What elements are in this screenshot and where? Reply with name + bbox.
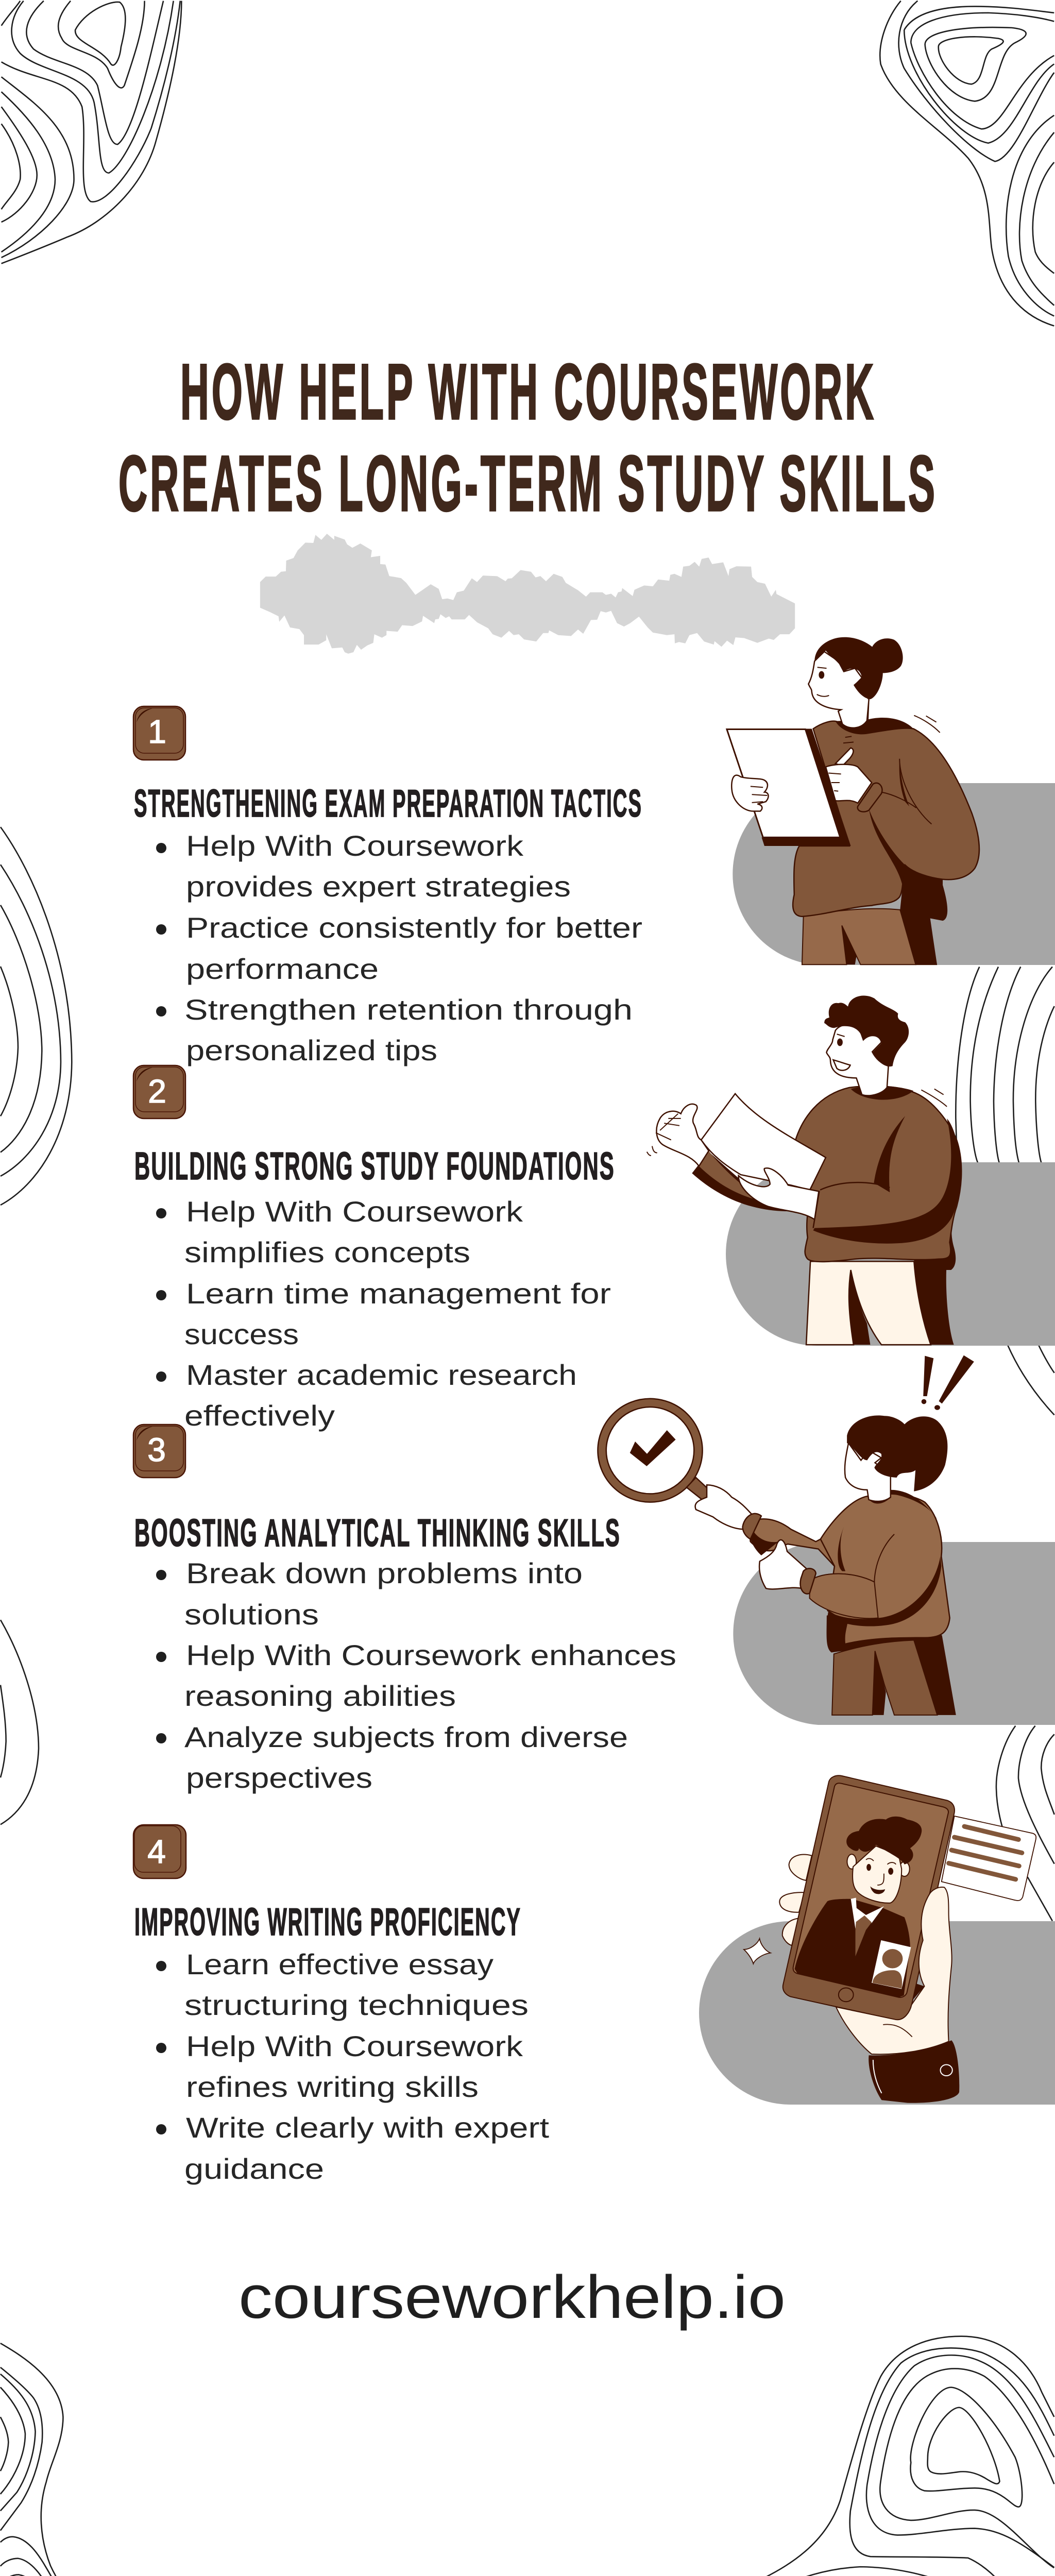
grey waveform under the title xyxy=(260,534,795,654)
decoration: left edge contour lines, upper xyxy=(1,827,72,1205)
bullet list 3 xyxy=(156,1557,676,1794)
decoration: bottom-right contour lines xyxy=(692,2336,1054,2576)
footer website: courseworkhelp.io xyxy=(239,2263,786,2331)
bullet list 2: effectively xyxy=(184,1399,335,1432)
panel: grey pill backdrop 1 xyxy=(733,783,1055,965)
number badge 1: 1 xyxy=(148,713,166,750)
bullet list 3: Analyze subjects from diverse xyxy=(184,1721,628,1753)
section 1: exam preparation xyxy=(133,706,642,1066)
panel: grey pill backdrop 3 xyxy=(733,1542,1055,1725)
number badge 4 xyxy=(133,1825,186,1878)
section 4: writing proficiency xyxy=(133,1825,550,2185)
number badge 2 xyxy=(133,1065,185,1118)
panel: grey pill backdrop 4 xyxy=(699,1921,1055,2105)
bullet list 2: simplifies concepts xyxy=(184,1236,470,1268)
number badge 3: 3 xyxy=(147,1431,166,1468)
number badge 4: 4 xyxy=(147,1833,166,1870)
bullet list 3: Help With Coursework enhances xyxy=(186,1639,676,1671)
bullet list 1: Practice consistently for better xyxy=(186,911,642,944)
decoration: left edge contour lines, lower xyxy=(1,1620,39,1824)
bullet list 4: Learn effective essay xyxy=(186,1948,494,1980)
bullet list 2: Learn time management for xyxy=(186,1277,611,1310)
panel: grey pill backdrop 2 xyxy=(726,1162,1055,1346)
bullet list 3: Break down problems into xyxy=(186,1557,583,1589)
bullet list 3: reasoning abilities xyxy=(184,1680,456,1712)
bullet list 2: success xyxy=(184,1318,299,1350)
heading 3: BOOSTING ANALYTICAL THINKING SKILLS xyxy=(134,1511,621,1554)
bullet list 4: Help With Coursework xyxy=(186,2030,523,2062)
bullet list 1: personalized tips xyxy=(186,1034,437,1066)
bullet list 4: structuring techniques xyxy=(184,1989,529,2021)
number badge 3 xyxy=(133,1425,185,1478)
decoration: top-left contour lines xyxy=(2,1,181,263)
bullet list 1: Strengthen retention through xyxy=(184,993,633,1026)
bullet list 1: Help With Coursework xyxy=(186,829,524,862)
decoration: top-right contour lines xyxy=(880,1,1054,326)
illustration: man with paper and thumbs up xyxy=(647,996,961,1345)
bullet list 4 xyxy=(156,1948,550,2185)
bullet list 2 xyxy=(156,1195,611,1432)
bullet list 1: performance xyxy=(186,953,379,985)
bullet list 2: Help With Coursework xyxy=(186,1195,523,1228)
title xyxy=(118,348,938,528)
bullet list 2: Master academic research xyxy=(186,1359,577,1391)
bullet list 3: perspectives xyxy=(186,1761,372,1794)
decoration: right edge contour lines behind the illustrations xyxy=(956,967,1054,1921)
heading 2: BUILDING STRONG STUDY FOUNDATIONS xyxy=(134,1144,615,1188)
section 3: analytical thinking xyxy=(133,1425,676,1794)
bullet list 4: refines writing skills xyxy=(186,2071,479,2103)
bullet list 1 xyxy=(156,829,642,1066)
bullet list 1: provides expert strategies xyxy=(186,870,571,903)
heading 4: IMPROVING WRITING PROFICIENCY xyxy=(134,1900,521,1943)
illustration: woman with clipboard xyxy=(727,637,979,965)
bullet list 3: solutions xyxy=(184,1598,319,1631)
section 2: study foundations xyxy=(133,1065,615,1432)
decoration: bottom-left contour lines xyxy=(1,2343,95,2576)
illustration: hand holding phone with video call xyxy=(744,1775,1036,2103)
bullet list 4: guidance xyxy=(184,2153,324,2185)
number badge 2: 2 xyxy=(148,1073,166,1110)
illustration: woman with magnifying glass xyxy=(598,1355,974,1715)
number badge 1 xyxy=(133,706,185,760)
bullet list 4: Write clearly with expert xyxy=(186,2111,550,2144)
